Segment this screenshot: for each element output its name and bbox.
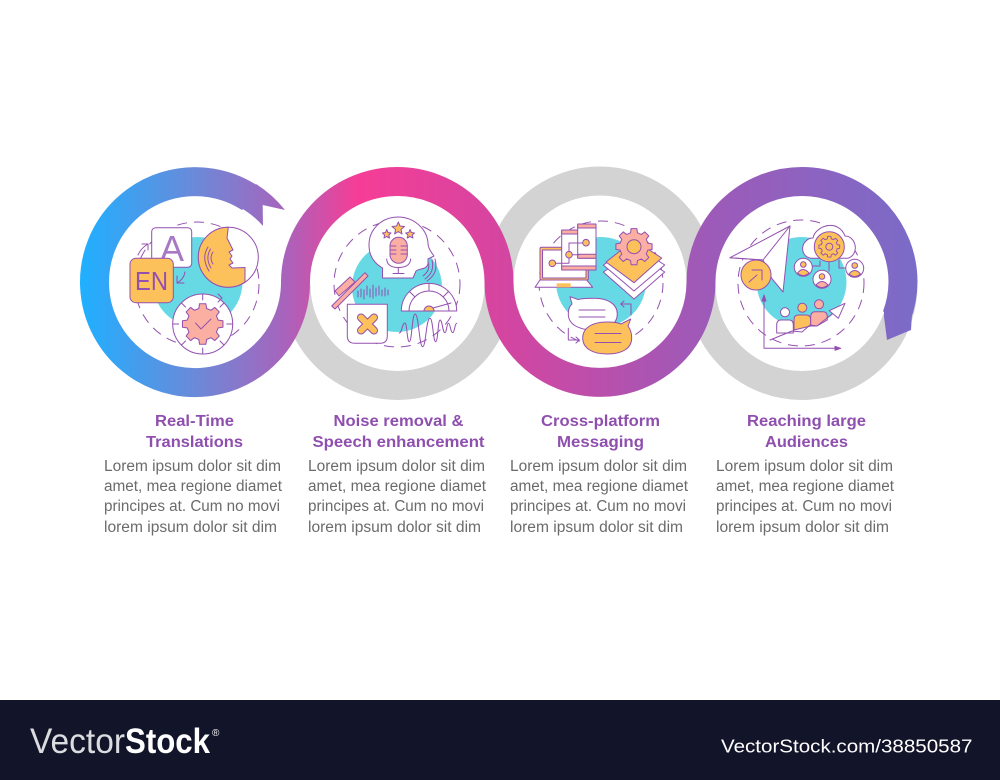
column 1 text: Lorem ipsum dolor sit dim — [104, 458, 281, 475]
column 4 text: principes at. Cum no movi — [716, 498, 892, 515]
column 3 text: lorem ipsum dolor sit dim — [510, 519, 683, 536]
column 2 text: principes at. Cum no movi — [308, 498, 484, 515]
column 3 text: Messaging — [557, 434, 644, 451]
logo: VectorStock: Stock — [125, 722, 210, 761]
icon: laptop — [535, 247, 593, 287]
icon: speaking face — [198, 227, 258, 287]
icon: chat bubbles — [568, 297, 632, 354]
column 2 text: Lorem ipsum dolor sit dim — [308, 458, 485, 475]
icon: cloud with gear — [803, 225, 855, 262]
column 3 text: Cross-platform — [541, 413, 660, 430]
icon: connected users — [794, 258, 864, 288]
column 4 text: Reaching large — [747, 413, 866, 430]
column 4 text: Audiences — [765, 434, 848, 451]
logo: VectorStock: ® — [212, 728, 220, 739]
icon: reaching large audiences — [730, 220, 864, 350]
column 3 text — [510, 413, 689, 536]
sound wave — [399, 314, 457, 347]
column 2 text — [308, 413, 487, 536]
column 2 text: Noise removal & — [334, 413, 464, 430]
column 4 text: Lorem ipsum dolor sit dim — [716, 458, 893, 475]
column 2 text: amet, mea regione diamet — [308, 478, 487, 495]
column 3 text: amet, mea regione diamet — [510, 478, 689, 495]
icon: gear over layers — [603, 229, 665, 299]
logo: VectorStock: Vector — [30, 722, 125, 761]
icon: letter A card: A — [160, 228, 184, 269]
icon: noise removal — [332, 217, 460, 347]
column 2 text: Speech enhancement — [312, 434, 485, 451]
column 4 text: lorem ipsum dolor sit dim — [716, 519, 889, 536]
column 1 text — [104, 413, 283, 536]
column 1 text: principes at. Cum no movi — [104, 498, 280, 515]
footer image id: VectorStock.com/38850587 — [721, 736, 972, 756]
footer bar — [0, 700, 1000, 780]
icon: gear check — [173, 294, 233, 354]
icon: EN card: EN — [135, 266, 168, 296]
column 1 text: lorem ipsum dolor sit dim — [104, 519, 277, 536]
column 4 text: amet, mea regione diamet — [716, 478, 895, 495]
icon: open box with cross — [332, 273, 388, 343]
icon: cross-platform messaging — [535, 221, 665, 354]
column 3 text: principes at. Cum no movi — [510, 498, 686, 515]
icon: tablet and phone — [549, 224, 596, 270]
logo: VectorStock — [30, 722, 220, 761]
column 1 text: amet, mea regione diamet — [104, 478, 283, 495]
column 1 text: Real-Time — [155, 413, 234, 430]
grey ring segments — [296, 181, 903, 386]
icon: gauge — [401, 283, 457, 311]
icon: head with microphone — [369, 217, 436, 281]
column 4 text — [716, 413, 895, 536]
icon: growth chart with people — [762, 295, 845, 350]
column 3 text: Lorem ipsum dolor sit dim — [510, 458, 687, 475]
column 1 text: Translations — [146, 434, 243, 451]
column 2 text: lorem ipsum dolor sit dim — [308, 519, 481, 536]
gradient ribbon with arrow head — [95, 182, 912, 383]
icon: real-time translations — [130, 222, 259, 354]
icon: paper plane — [730, 226, 790, 292]
